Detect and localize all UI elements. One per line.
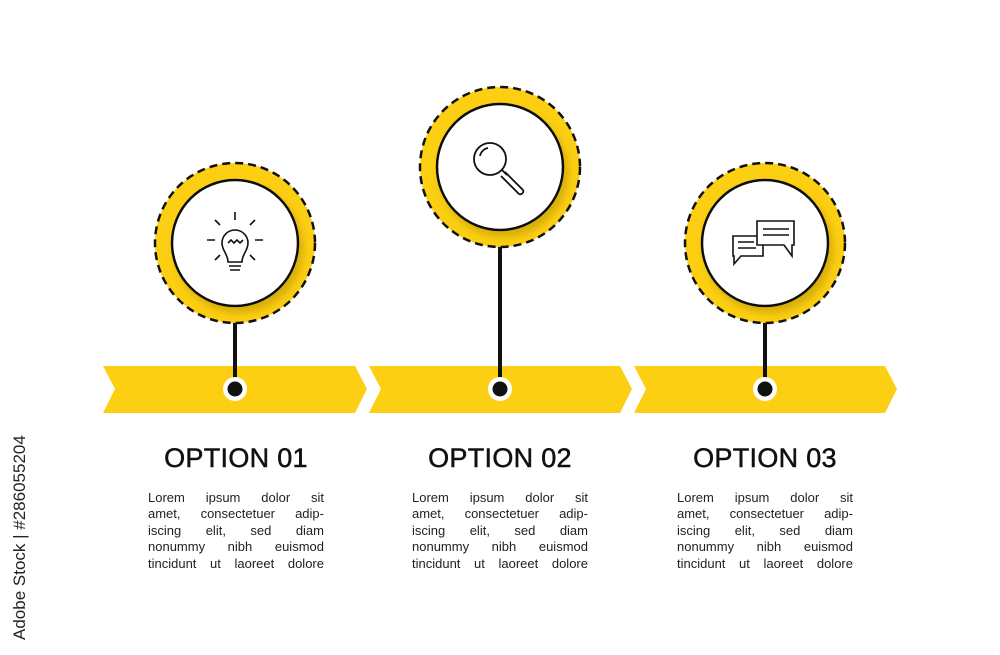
text block: option 02: sit bbox=[575, 490, 588, 505]
text block: option 01: diam bbox=[296, 523, 324, 538]
step 3 marker bbox=[685, 163, 845, 401]
arrow bar 1 bbox=[103, 366, 367, 413]
text block: option 02: consectetuer bbox=[465, 506, 539, 521]
text block: option 02: iscing bbox=[412, 523, 445, 538]
text block: option 02: nonummy bbox=[412, 539, 469, 554]
text block: option 01: sit bbox=[311, 490, 324, 505]
text block: option 03 bbox=[677, 490, 853, 571]
arrow bar 3 bbox=[634, 366, 897, 413]
text block: option 02: ut bbox=[474, 556, 485, 571]
text block: option 02: dolore bbox=[552, 556, 588, 571]
watermark vertical text: Adobe Stock | #286055204 bbox=[10, 435, 29, 640]
text block: option 01 bbox=[148, 490, 324, 571]
text block: option 02: diam bbox=[560, 523, 588, 538]
icon: chat bubbles bbox=[733, 221, 794, 264]
text block: option 02: sed bbox=[514, 523, 535, 538]
text block: option 03: euismod bbox=[804, 539, 853, 554]
text block: option 03: amet, bbox=[677, 506, 710, 521]
text block: option 03: dolor bbox=[790, 490, 819, 505]
text block: option 02: laoreet bbox=[498, 556, 538, 571]
heading: option 02: OPTION 02 bbox=[428, 443, 572, 473]
icon: magnifier bbox=[474, 143, 523, 194]
text block: option 03: ipsum bbox=[735, 490, 769, 505]
text block: option 02: adip- bbox=[559, 506, 588, 521]
text block: option 02 bbox=[412, 490, 588, 571]
text block: option 03: nibh bbox=[757, 539, 781, 554]
text block: option 01: consectetuer bbox=[201, 506, 275, 521]
text block: option 01: tincidunt bbox=[148, 556, 196, 571]
text block: option 03: ut bbox=[739, 556, 750, 571]
text block: option 01: dolor bbox=[261, 490, 290, 505]
text block: option 03: diam bbox=[825, 523, 853, 538]
text block: option 01: dolore bbox=[288, 556, 324, 571]
icon: light bulb bbox=[207, 212, 263, 270]
text block: option 01: adip- bbox=[295, 506, 324, 521]
text block: option 02: amet, bbox=[412, 506, 445, 521]
text block: option 01: sed bbox=[250, 523, 271, 538]
text block: option 01: laoreet bbox=[234, 556, 274, 571]
text block: option 03: Lorem bbox=[677, 490, 714, 505]
text block: option 02: nibh bbox=[492, 539, 516, 554]
text block: option 01: euismod bbox=[275, 539, 324, 554]
arrow bar 2 bbox=[369, 366, 632, 413]
text block: option 01: Lorem bbox=[148, 490, 185, 505]
step 1 marker bbox=[155, 163, 315, 401]
step 2 marker bbox=[420, 87, 580, 401]
text block: option 01: elit, bbox=[206, 523, 226, 538]
text block: option 03: nonummy bbox=[677, 539, 734, 554]
text block: option 01: nibh bbox=[228, 539, 252, 554]
text block: option 03: consectetuer bbox=[730, 506, 804, 521]
text block: option 01: nonummy bbox=[148, 539, 205, 554]
text block: option 01: ut bbox=[210, 556, 221, 571]
text block: option 02: elit, bbox=[470, 523, 490, 538]
heading: option 03: OPTION 03 bbox=[693, 443, 837, 473]
text block: option 03: laoreet bbox=[763, 556, 803, 571]
text block: option 02: euismod bbox=[539, 539, 588, 554]
text block: option 02: Lorem bbox=[412, 490, 449, 505]
text block: option 02: tincidunt bbox=[412, 556, 460, 571]
text block: option 03: sit bbox=[840, 490, 853, 505]
text block: option 02: ipsum bbox=[470, 490, 504, 505]
heading: option 01: OPTION 01 bbox=[164, 443, 308, 473]
text block: option 03: tincidunt bbox=[677, 556, 725, 571]
text block: option 02: dolor bbox=[525, 490, 554, 505]
text block: option 01: iscing bbox=[148, 523, 181, 538]
text block: option 01: ipsum bbox=[206, 490, 240, 505]
text block: option 01: amet, bbox=[148, 506, 181, 521]
text block: option 03: adip- bbox=[824, 506, 853, 521]
text block: option 03: elit, bbox=[735, 523, 755, 538]
text block: option 03: iscing bbox=[677, 523, 710, 538]
text block: option 03: sed bbox=[779, 523, 800, 538]
text block: option 03: dolore bbox=[817, 556, 853, 571]
